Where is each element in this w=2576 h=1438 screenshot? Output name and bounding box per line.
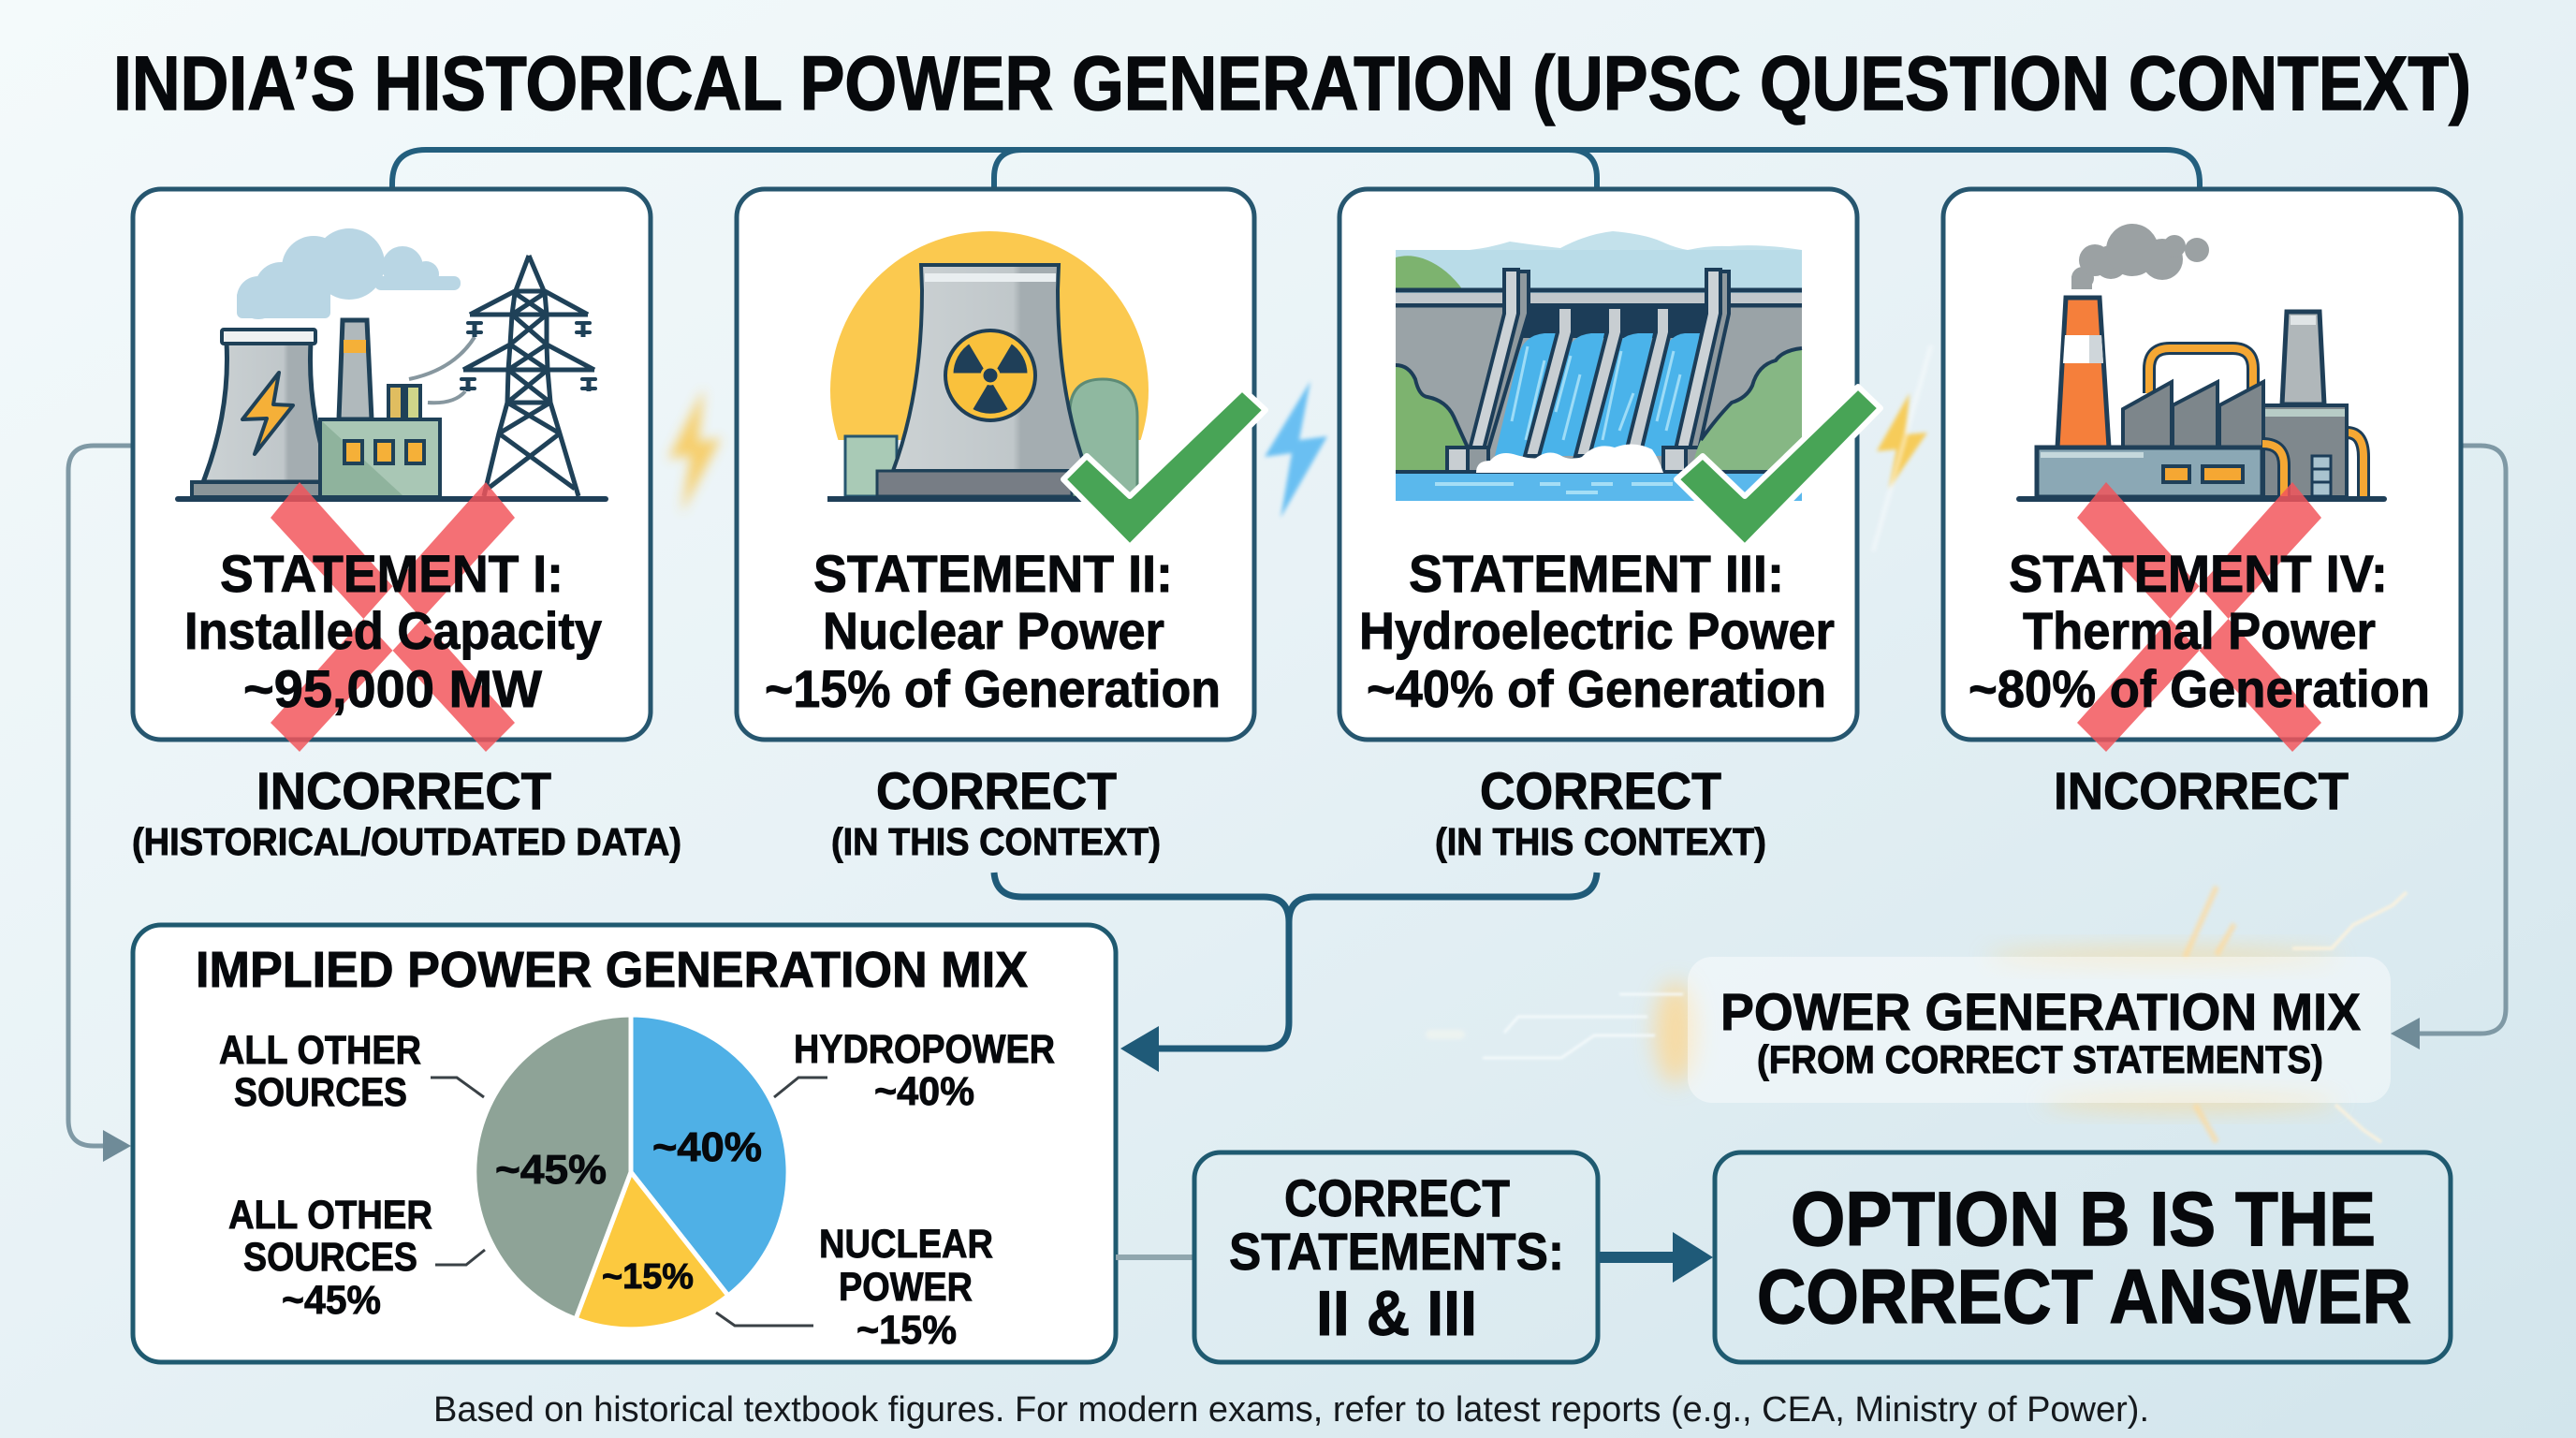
panel: statement IV card [1943, 189, 2461, 752]
label: nuclear power [819, 1222, 993, 1353]
arrow: mix panel to correct statements [1116, 1255, 1194, 1260]
pie chart [475, 1015, 788, 1329]
text: statement IV: Thermal Power [2023, 601, 2376, 660]
icon: green check mark [1063, 389, 1266, 547]
panel: statement II card [737, 189, 1266, 740]
text: statement III [1359, 544, 1835, 718]
verdict: statement I incorrect: INCORRECT [256, 761, 551, 820]
verdict: statement III correct: (IN THIS CONTEXT) [1435, 820, 1766, 863]
callout: glowing power generation mix: POWER GENERATION MIX [1720, 982, 2361, 1041]
label: hydropower: ~40% [874, 1069, 974, 1114]
text: statement I: STATEMENT I: [220, 544, 564, 603]
panel: correct statements: STATEMENTS: [1229, 1222, 1564, 1281]
inner dam pillars [1525, 307, 1670, 456]
heading: implied mix: IMPLIED POWER GENERATION MIX [196, 942, 1028, 998]
panel: statement I card [133, 189, 651, 752]
icon: transmission pylon [461, 256, 595, 496]
text: statement IV: STATEMENT IV: [2009, 544, 2388, 603]
panel: final answer: OPTION B IS THE [1791, 1177, 2376, 1262]
label: hydropower [794, 1027, 1055, 1114]
label: all other sources lower [228, 1193, 432, 1323]
text: statement II [765, 544, 1221, 718]
text: statement III: Hydroelectric Power [1359, 601, 1835, 660]
icon: thermal power plant [2019, 224, 2384, 499]
callout: glowing power generation mix [1426, 887, 2407, 1142]
panel: final answer: CORRECT ANSWER [1757, 1255, 2411, 1340]
icon: green check mark [1676, 387, 1881, 547]
icon: nuclear cooling tower [827, 231, 1149, 502]
text: statement II: ~15% of Generation [765, 659, 1221, 718]
pie values: ~15% [602, 1257, 694, 1297]
panel: correct statements: II & III [1316, 1278, 1477, 1349]
text: statement I: ~95,000 MW [243, 659, 542, 718]
label: nuclear power: POWER [839, 1265, 973, 1310]
pie values [495, 1124, 762, 1297]
text: statement IV [1969, 544, 2430, 718]
verdict: statement II correct: (IN THIS CONTEXT) [831, 820, 1161, 863]
decorative energy glow [1426, 887, 2407, 1142]
verdict: statement IV incorrect: INCORRECT [2054, 761, 2349, 820]
text: statement I: Installed Capacity [184, 601, 602, 660]
panel: final answer [1715, 1152, 2451, 1362]
outer dam pillars [1447, 270, 1729, 472]
verdict: statement I incorrect: (HISTORICAL/OUTDATED DATA) [132, 820, 681, 863]
pie values: ~45% [495, 1147, 607, 1193]
label: all other sources lower: ~45% [282, 1278, 381, 1323]
callout: glowing power generation mix: (FROM CORRECT STATEMENTS) [1757, 1037, 2323, 1081]
text: statement III: ~40% of Generation [1367, 659, 1826, 718]
text: statement I [184, 544, 602, 718]
icon: blue lightning glow between cards II and III [1265, 381, 1327, 518]
text: statement II: Nuclear Power [823, 601, 1164, 660]
arrow: correct statements to answer [1598, 1232, 1713, 1283]
label: hydropower: HYDROPOWER [794, 1027, 1055, 1072]
icon: yellow lightning glow between cards I and II [668, 389, 721, 513]
icon: red incorrect cross [2077, 482, 2321, 752]
verdict: statement III correct [1435, 761, 1766, 863]
icon: hydroelectric dam [1396, 231, 1802, 501]
arrow: grey connector from statement I to mix panel [68, 446, 132, 1162]
verdict: statement II correct: CORRECT [876, 761, 1117, 820]
label: all other sources upper: ALL OTHER [219, 1028, 421, 1073]
label: nuclear power: ~15% [856, 1308, 957, 1353]
verdict: statement I incorrect [132, 761, 681, 863]
footer note: Based on historical textbook figures. For modern exams, refer to latest reports (e.g., CEA, Ministry of Power). [433, 1390, 2149, 1430]
label: nuclear power: NUCLEAR [819, 1222, 993, 1267]
text: statement III: STATEMENT III: [1409, 544, 1784, 603]
panel: correct statements [1194, 1152, 1598, 1362]
verdict: statement II correct [831, 761, 1161, 863]
panel: correct statements: CORRECT [1284, 1168, 1510, 1227]
icon: yellow lightning glow between cards III and IV [1873, 345, 1931, 551]
label: all other sources lower: SOURCES [243, 1235, 417, 1280]
text: statement IV: ~80% of Generation [1969, 659, 2430, 718]
verdict: statement III correct: CORRECT [1480, 761, 1721, 820]
text: statement II: STATEMENT II: [813, 544, 1173, 603]
label: all other sources upper [219, 1028, 421, 1115]
pie values: ~40% [652, 1124, 762, 1170]
arrow: top connector linking statement cards [392, 150, 2200, 190]
label: all other sources upper: SOURCES [234, 1070, 407, 1115]
pie leader lines [431, 1078, 827, 1326]
icon: power plant and pylon [178, 228, 606, 499]
arrow: grey connector from statement IV to power generation mix [2391, 446, 2506, 1049]
arrow: correct statements connector to mix panel [994, 873, 1597, 1072]
label: all other sources lower: ALL OTHER [228, 1193, 432, 1238]
icon: red incorrect cross [271, 482, 515, 752]
panel: implied power generation mix [133, 925, 1116, 1362]
panel: statement III card [1339, 189, 1881, 740]
